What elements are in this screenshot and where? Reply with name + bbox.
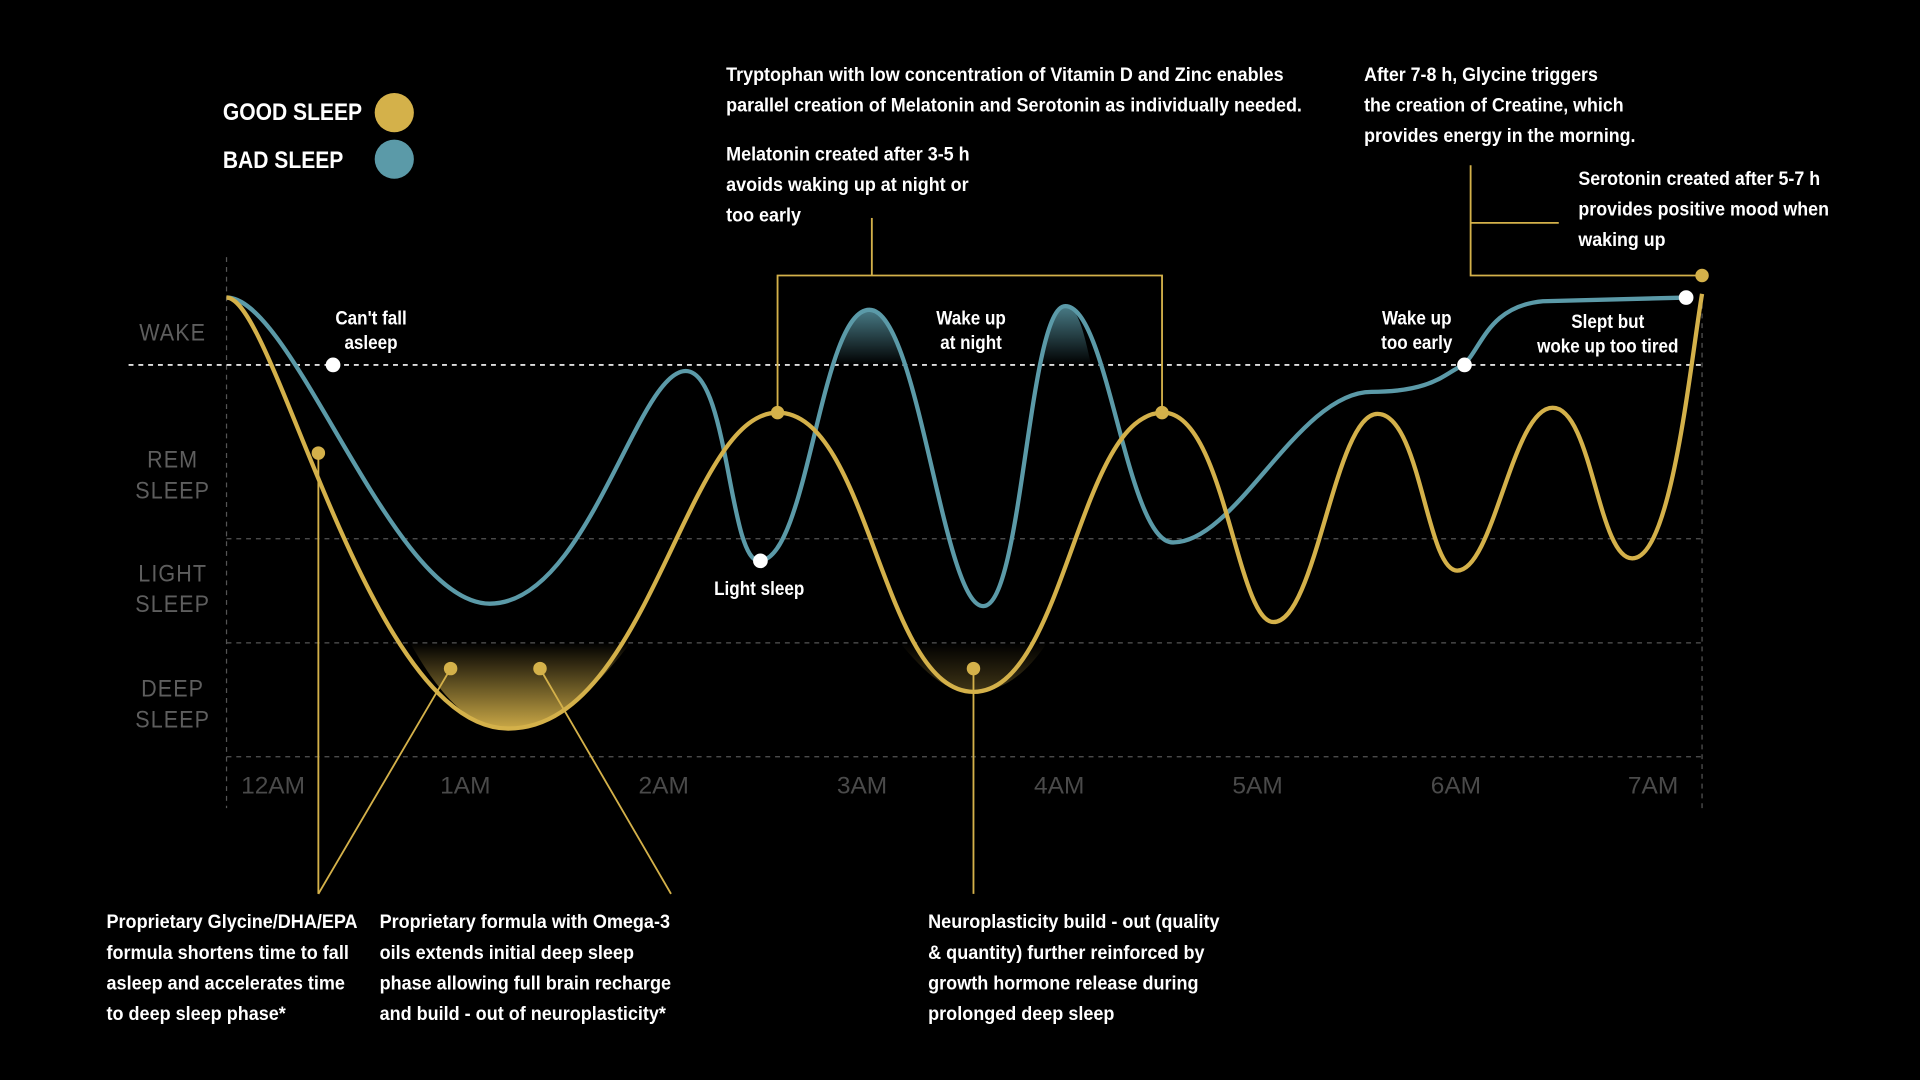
top annotations: Melatonin created after 3-5 h xyxy=(726,143,970,165)
y axis labels xyxy=(135,318,210,733)
top annotations: avoids waking up at night or xyxy=(726,174,969,195)
legend: GOOD SLEEP xyxy=(223,97,362,125)
y axis labels: SLEEP xyxy=(135,590,210,618)
top annotations: Tryptophan with low concentration of Vitamin D and Zinc enables xyxy=(726,63,1284,85)
y axis labels: WAKE xyxy=(139,318,206,346)
y axis labels: SLEEP xyxy=(135,476,210,504)
bottom annotations: and build - out of neuroplasticity* xyxy=(380,1003,667,1024)
x axis labels: 1AM xyxy=(440,772,490,799)
x axis labels xyxy=(241,772,1678,799)
annotation lines xyxy=(318,165,1702,894)
x axis labels: 3AM xyxy=(837,772,887,799)
fills xyxy=(410,306,1091,729)
x axis labels: 2AM xyxy=(639,772,689,799)
x axis labels: 4AM xyxy=(1034,772,1084,799)
top annotations: parallel creation of Melatonin and Serotonin as individually needed. xyxy=(726,94,1302,116)
x axis labels: 5AM xyxy=(1232,772,1283,799)
x axis labels: 12AM xyxy=(241,772,305,799)
legend: BAD SLEEP xyxy=(223,145,343,173)
top annotations: After 7-8 h, Glycine triggers xyxy=(1364,63,1598,85)
curve labels: Wake up xyxy=(936,308,1006,329)
bad sleep curve xyxy=(227,298,1686,606)
bottom annotations: Proprietary Glycine/DHA/EPA xyxy=(107,911,358,932)
top annotations: Serotonin created after 5-7 h xyxy=(1578,167,1820,189)
legend xyxy=(223,93,414,179)
bottom annotations: prolonged deep sleep xyxy=(928,1003,1114,1024)
y axis labels: DEEP xyxy=(141,674,204,702)
bottom annotations: asleep and accelerates time xyxy=(107,972,345,993)
curve labels: at night xyxy=(940,332,1002,353)
y axis labels: LIGHT xyxy=(138,559,207,587)
top annotations: too early xyxy=(726,204,802,226)
top annotations xyxy=(726,63,1829,250)
curve labels: Light sleep xyxy=(714,578,804,599)
curve labels: Slept but xyxy=(1571,311,1644,332)
curve labels: woke up too tired xyxy=(1536,336,1678,357)
y axis labels: SLEEP xyxy=(135,705,210,733)
bottom annotations: to deep sleep phase* xyxy=(107,1003,287,1024)
top annotations: waking up xyxy=(1577,229,1666,250)
good sleep curve xyxy=(227,294,1702,729)
bottom annotations: formula shortens time to fall xyxy=(107,941,349,963)
top annotations: provides positive mood when xyxy=(1578,198,1829,220)
x axis labels: 6AM xyxy=(1431,772,1481,799)
dots xyxy=(312,269,1709,675)
bottom annotations: Neuroplasticity build - out (quality xyxy=(928,911,1220,932)
curve labels: Can't fall xyxy=(335,308,407,329)
bottom annotations: phase allowing full brain recharge xyxy=(380,972,671,993)
top annotations: provides energy in the morning. xyxy=(1364,125,1636,146)
curve labels: too early xyxy=(1381,332,1452,353)
bottom annotations: growth hormone release during xyxy=(928,972,1199,993)
bottom annotations xyxy=(107,911,1220,1024)
grid xyxy=(227,257,1702,808)
top annotations: the creation of Creatine, which xyxy=(1364,94,1624,116)
bottom annotations: & quantity) further reinforced by xyxy=(928,941,1205,963)
curve labels: Wake up xyxy=(1382,308,1452,329)
x axis labels: 7AM xyxy=(1628,772,1678,799)
bottom annotations: Proprietary formula with Omega-3 xyxy=(380,911,670,932)
curve labels xyxy=(335,308,1678,599)
curve labels: asleep xyxy=(344,332,398,353)
bottom annotations: oils extends initial deep sleep xyxy=(380,941,634,963)
y axis labels: REM xyxy=(147,445,198,473)
